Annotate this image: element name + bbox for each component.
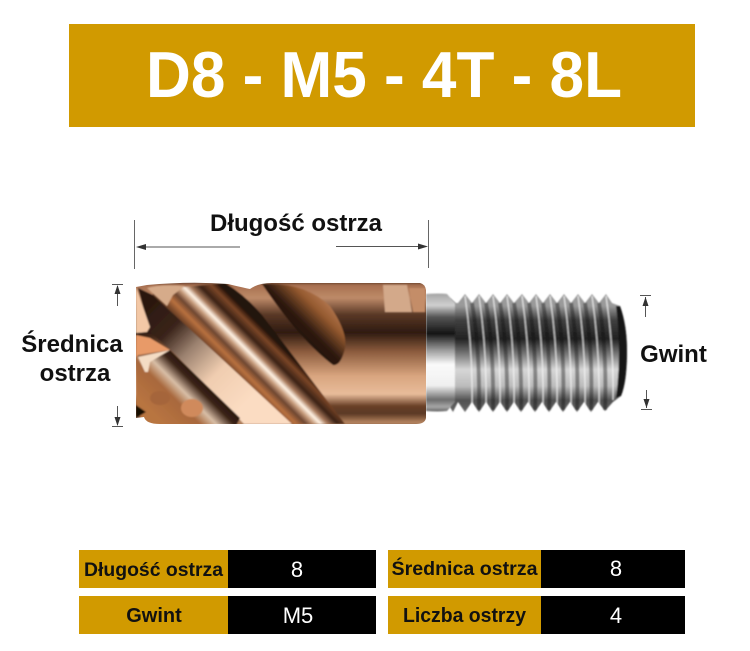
row: cutting length: Długość ostrza	[84, 559, 223, 581]
neck collar	[426, 294, 455, 412]
cutter body	[130, 280, 430, 430]
row: cutting diameter: Średnica ostrza	[392, 556, 538, 580]
top relief facet	[147, 285, 185, 306]
row: cutting length: 8	[291, 557, 303, 582]
spec table: left column	[79, 550, 376, 634]
dimension: cutting diameter	[21, 284, 123, 426]
row: thread	[79, 596, 376, 634]
row: number of flutes: 4	[610, 603, 622, 628]
row: number of flutes: Liczba ostrzy	[403, 605, 527, 627]
upper flute pocket	[262, 284, 345, 365]
row: thread: M5	[283, 603, 313, 628]
row: cutting diameter	[388, 550, 685, 588]
main helical land	[138, 288, 292, 424]
dimension: cutting length	[134, 210, 428, 269]
dimension: cutting length: Długość ostrza	[210, 210, 383, 237]
key flat	[383, 285, 412, 312]
spec table: right column	[388, 550, 685, 634]
tip facets	[136, 287, 150, 333]
end mill illustration	[130, 280, 627, 430]
title banner: D8 - M5 - 4T - 8L	[146, 38, 622, 111]
dimension: cutting diameter: Średnica	[21, 330, 123, 358]
row: number of flutes	[388, 596, 685, 634]
middle helical land	[153, 283, 345, 424]
row: cutting diameter: 8	[610, 556, 622, 581]
lower land	[136, 350, 240, 426]
row: thread: Gwint	[126, 605, 182, 627]
row: cutting length	[79, 550, 376, 588]
dimension: thread	[640, 296, 707, 410]
threaded shank	[448, 294, 627, 412]
title banner	[69, 24, 695, 127]
dimension: cutting diameter: ostrza	[40, 360, 111, 387]
dimension: thread: Gwint	[640, 341, 707, 368]
